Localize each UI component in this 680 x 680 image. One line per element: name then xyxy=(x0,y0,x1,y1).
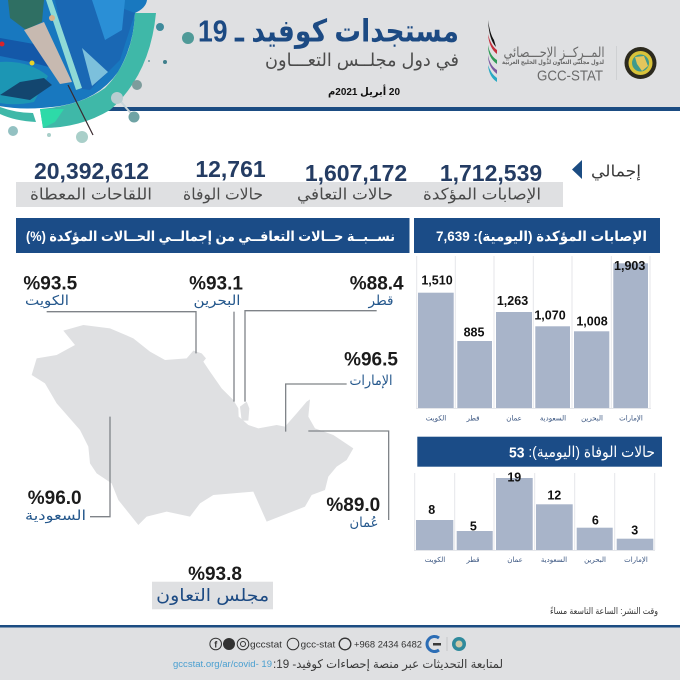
callout: UAE: الإمارات xyxy=(350,373,392,389)
bar chart: daily deaths: 19 xyxy=(507,471,521,485)
footer link line: gccstat.org/ar/covid- 19 xyxy=(173,659,272,669)
date: 20 أبريل 2021م xyxy=(328,84,400,98)
stat: confirmed cases: 1,712,539 xyxy=(440,160,542,186)
stat: vaccines administered: 20,392,612 xyxy=(34,158,149,184)
callout: Saudi Arabia xyxy=(25,488,86,524)
callout: Qatar: %88.4 xyxy=(350,273,404,294)
stats band xyxy=(16,182,563,207)
panel: daily deaths heading xyxy=(417,437,662,467)
footer band xyxy=(0,625,680,680)
header band xyxy=(0,0,680,111)
logo: GCC-STAT: المــركــز الإحـــصائي xyxy=(504,44,604,61)
callout: Kuwait: %93.5 xyxy=(23,273,78,294)
leader lines xyxy=(47,311,389,520)
callout: Saudi Arabia: السعودية xyxy=(25,508,86,524)
bar chart: daily deaths xyxy=(414,471,655,564)
callout: Oman: عُمان xyxy=(350,515,378,530)
bar chart: daily confirmed cases: 1,510 xyxy=(421,274,453,288)
stat: recoveries: 1,607,172 xyxy=(305,160,407,186)
callout: Oman: %89.0 xyxy=(326,495,380,516)
callout: Kuwait xyxy=(23,273,78,309)
footer link line: لمتابعة التحديثات عبر منصة إحصاءات كوفيد- 19: xyxy=(273,657,503,672)
bar chart: daily deaths: البحرين xyxy=(584,557,606,564)
panel: daily deaths heading: حالات الوفاة (اليومية): 53 xyxy=(509,444,655,461)
logo: GCC emblem xyxy=(624,47,656,79)
callout: GCC total: مجلس التعاون xyxy=(156,586,269,605)
stat: confirmed cases: الإصابات المؤكدة xyxy=(423,186,541,204)
panel: daily confirmed cases heading: الإصابات المؤكدة (اليومية): 7,639 xyxy=(436,228,647,245)
stat: deaths: 12,761 xyxy=(195,156,266,182)
footer link line xyxy=(173,657,503,672)
stat: deaths: حالات الوفاة xyxy=(183,186,263,204)
bar chart: daily confirmed cases: 1,263 xyxy=(497,294,528,308)
bar chart: daily deaths: 12 xyxy=(547,488,561,502)
bar chart: daily confirmed cases: الإمارات xyxy=(619,416,643,422)
callout: Oman xyxy=(326,495,380,530)
bar chart: daily deaths: 5 xyxy=(470,520,477,534)
header illustration: virus disc and syringe xyxy=(0,0,156,135)
footer social icons and handles: +968 2434 6482 xyxy=(354,640,422,650)
bar chart: daily deaths: الإمارات xyxy=(624,557,648,564)
bar chart: daily confirmed cases: قطر xyxy=(466,416,479,422)
callout: UAE: %96.5 xyxy=(344,349,398,370)
bar chart: daily confirmed cases: 1,070 xyxy=(534,308,566,322)
bar chart: daily deaths: قطر xyxy=(466,557,479,564)
bar chart: daily confirmed cases: 885 xyxy=(464,326,484,340)
bar chart: daily deaths: 8 xyxy=(428,503,435,517)
total label with arrow: إجمالي xyxy=(591,164,641,182)
callout: Kuwait: الكويت xyxy=(25,293,69,309)
stat: recoveries: حالات التعافي xyxy=(297,186,393,204)
callout: Qatar: قطر xyxy=(367,293,394,309)
callout: Saudi Arabia: %96.0 xyxy=(28,488,82,509)
bar chart: daily deaths: 3 xyxy=(631,523,638,537)
bar chart: daily confirmed cases: السعودية xyxy=(540,416,566,422)
callout: GCC total: %93.8 xyxy=(188,564,242,585)
callout: Bahrain xyxy=(189,273,243,309)
bar chart: daily confirmed cases: الكويت xyxy=(426,414,446,422)
footer social icons and handles xyxy=(210,637,466,652)
logo: GCC-STAT: GCC-STAT xyxy=(537,68,603,84)
callout: Bahrain: البحرين xyxy=(194,293,240,309)
bar chart: daily deaths: 6 xyxy=(592,513,599,527)
panel: daily confirmed cases heading xyxy=(414,218,660,253)
stat: recoveries xyxy=(297,160,407,204)
callout: UAE xyxy=(344,349,398,389)
total label with arrow xyxy=(572,160,641,182)
callout: Qatar xyxy=(350,273,404,309)
molecule decorations xyxy=(8,23,194,143)
stat: confirmed cases xyxy=(423,160,542,204)
bar chart: daily confirmed cases: عمان xyxy=(506,416,522,422)
stat: vaccines administered: اللقاحات المعطاة xyxy=(30,186,152,204)
footer social icons and handles: gccstat xyxy=(250,640,282,650)
logo: GCC-STAT: لدول مجلس التعاون لدول الخليج العربية xyxy=(502,59,604,66)
bar chart: daily deaths: السعودية xyxy=(541,557,567,564)
panel: recovery rate heading xyxy=(16,218,410,253)
callout: GCC total xyxy=(152,564,273,609)
callout: Bahrain: %93.1 xyxy=(189,273,243,294)
footer social icons and handles: f xyxy=(214,640,218,650)
bar chart: daily confirmed cases xyxy=(416,256,651,422)
subtitle: في دول مجلــس التعـــاون xyxy=(265,50,459,71)
panel: recovery rate heading: نســبــة حــالات التعافــي من إجمالــي الحــالات المؤكدة (%) xyxy=(26,228,395,245)
footer social icons and handles: gcc-stat xyxy=(301,640,336,650)
stat: vaccines administered xyxy=(30,158,152,204)
bar chart: daily confirmed cases: 1,008 xyxy=(576,315,608,329)
bar chart: daily deaths: عمان xyxy=(507,557,523,564)
title: مستجدات كوفيد ـ 19 xyxy=(198,14,459,50)
publication time note: وقت النشر: الساعة التاسعة مساءً xyxy=(550,606,658,616)
bar chart: daily confirmed cases: 1,903 xyxy=(614,259,645,273)
bar chart: daily confirmed cases: البحرين xyxy=(581,416,603,422)
bar chart: daily deaths: الكويت xyxy=(425,556,445,564)
logo: GCC-STAT xyxy=(488,20,617,84)
stat: deaths xyxy=(183,156,266,204)
map of GCC countries xyxy=(32,325,353,525)
